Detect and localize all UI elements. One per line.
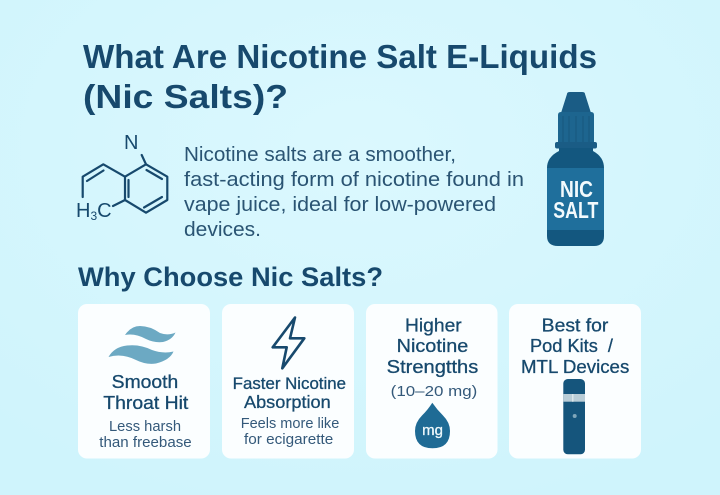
card text: faster nicotine absorption: Feels more like xyxy=(241,415,339,432)
card text: smooth throat hit: Throat Hit xyxy=(103,392,188,413)
card text: faster nicotine absorption: Absorption xyxy=(244,392,331,412)
card text: smooth throat hit: Less harsh xyxy=(109,418,181,435)
icon: nic salt bottle xyxy=(547,92,604,246)
card text: faster nicotine absorption: for ecigarette xyxy=(244,431,333,448)
title xyxy=(83,39,597,116)
card text: higher nicotine strengths xyxy=(387,314,478,400)
icon: molecule: 3 xyxy=(90,209,97,223)
icon: mg drop: mg xyxy=(422,422,443,439)
card text: higher nicotine strengths: Strengtths xyxy=(387,356,478,377)
card text: higher nicotine strengths: Higher xyxy=(405,314,462,336)
card text: smooth throat hit xyxy=(99,371,192,451)
icon: molecule xyxy=(76,132,167,223)
icon: molecule: H xyxy=(76,200,90,222)
intro text: fast-acting form of nicotine found in xyxy=(184,168,524,191)
card text: smooth throat hit: Smooth xyxy=(112,371,178,392)
intro text: devices. xyxy=(184,218,261,241)
icon: waves xyxy=(108,326,176,364)
card text: smooth throat hit: than freebase xyxy=(99,434,192,451)
card text: higher nicotine strengths: Nicotine xyxy=(397,335,468,356)
title: (Nic Salts)? xyxy=(83,79,288,116)
card text: best for pod kits xyxy=(521,314,629,377)
title: What Are Nicotine Salt E-Liquids xyxy=(83,39,597,76)
heading: why choose: Why Choose Nic Salts? xyxy=(78,262,383,292)
card text: higher nicotine strengths: (10–20 mg) xyxy=(391,383,477,400)
icon: mg drop xyxy=(415,403,450,448)
icon: pod device xyxy=(563,379,585,454)
icon: molecule: C xyxy=(97,200,112,222)
icon: lightning bolt xyxy=(273,318,304,368)
card text: faster nicotine absorption: Faster Nicotine xyxy=(233,375,346,393)
panel: faster nicotine absorption xyxy=(222,304,354,458)
card text: faster nicotine absorption xyxy=(233,375,346,448)
panel: higher nicotine strengths xyxy=(366,304,498,458)
card text: best for pod kits: MTL Devices xyxy=(521,356,629,377)
card text: best for pod kits: Pod Kits / xyxy=(530,335,614,356)
icon: nic salt bottle: NIC xyxy=(560,176,593,202)
intro text: vape juice, ideal for low-powered xyxy=(184,193,496,216)
panel: best for pod kits xyxy=(509,304,641,458)
icon: molecule: N xyxy=(124,132,138,154)
icon: nic salt bottle: SALT xyxy=(553,197,598,223)
intro text xyxy=(184,143,524,241)
panel: smooth throat hit xyxy=(78,304,210,458)
card text: best for pod kits: Best for xyxy=(542,314,608,336)
intro text: Nicotine salts are a smoother, xyxy=(184,143,456,166)
